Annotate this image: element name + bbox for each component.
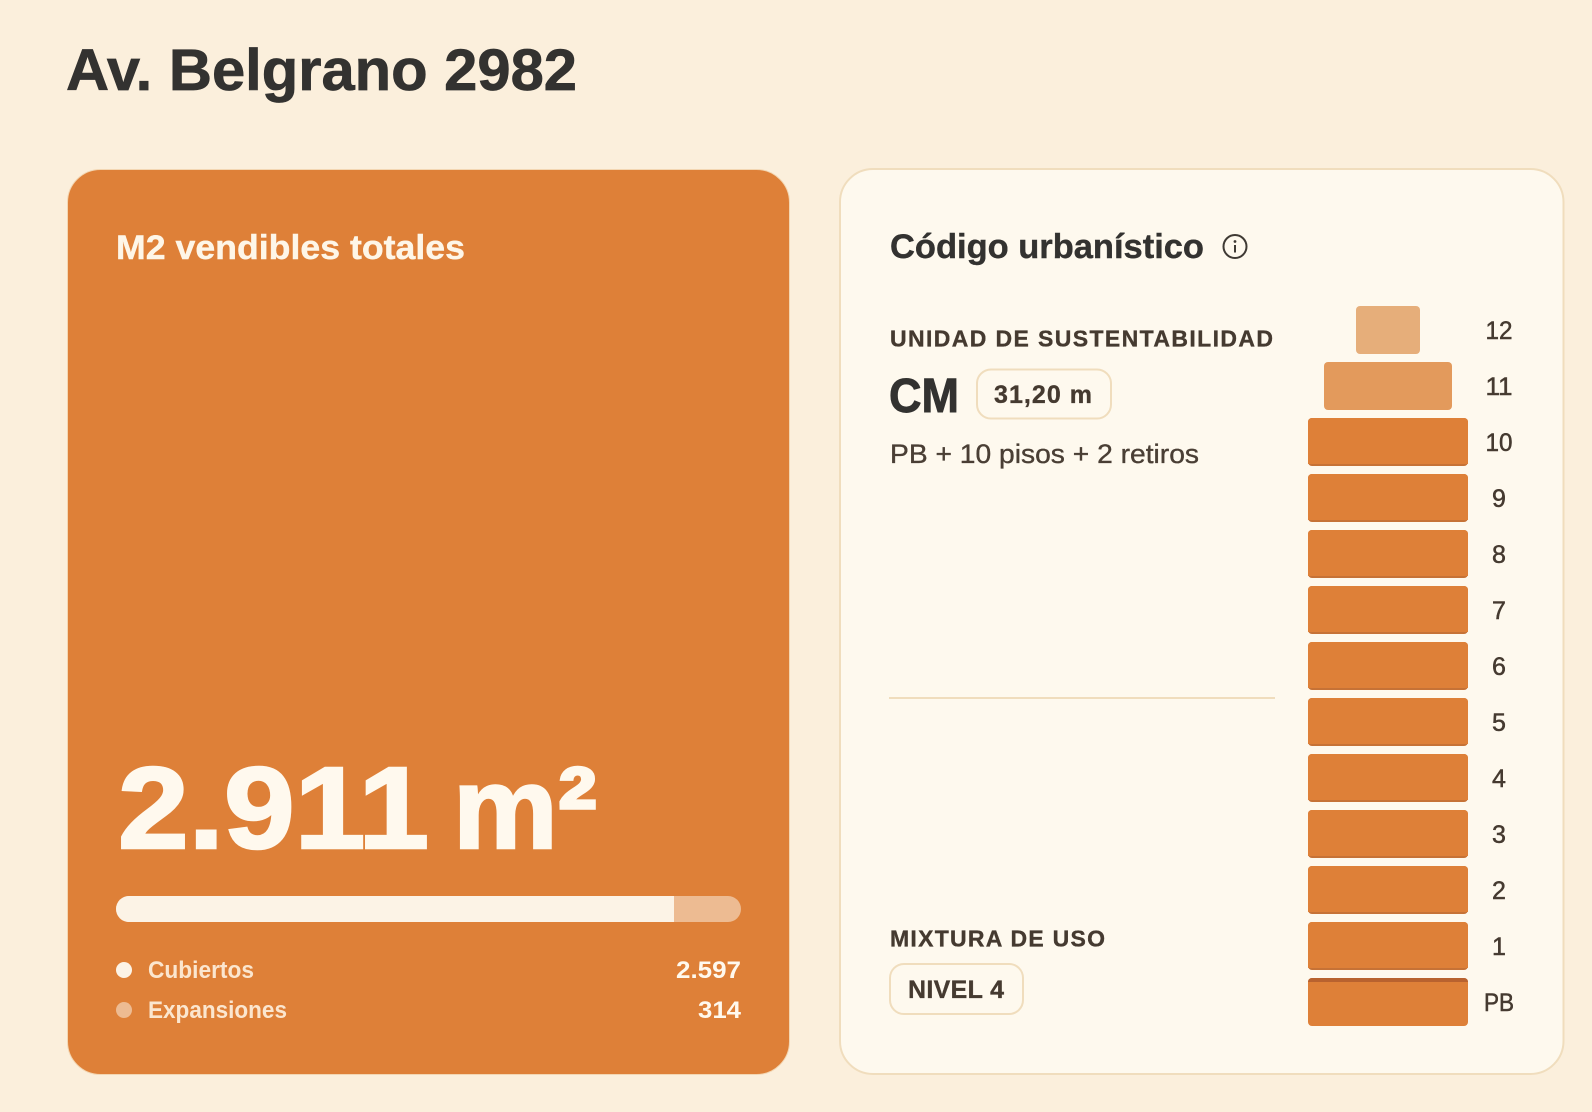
chart: building floors [1308,306,1514,1026]
floor 3: 3 [1492,821,1506,849]
panel: M2 vendibles totales [68,170,790,1074]
floor 1 [1308,922,1506,970]
floor PB: PB [1484,989,1514,1017]
total value [118,743,597,873]
badge: height [977,370,1111,418]
legend: Cubiertos: 2.597 [676,957,741,984]
floor 9 [1308,474,1506,522]
floor 3 [1308,810,1506,858]
floor 6: 6 [1492,653,1506,681]
legend: Expansiones [116,997,742,1024]
label: unidad de sustentabilidad: UNIDAD DE SUSTENTABILIDAD [890,326,1273,352]
badge: nivel: NIVEL 4 [908,976,1004,1004]
title: Av. Belgrano 2982 [66,38,577,103]
floor 5 [1308,698,1506,746]
icon: info [1224,235,1246,258]
floor 4: 4 [1492,765,1506,793]
description: PB + 10 pisos + 2 retiros [890,439,1199,469]
floor 7: 7 [1492,597,1506,625]
legend: Expansiones: 314 [698,997,742,1024]
badge: height: 31,20 m [994,381,1092,409]
floor 1: 1 [1492,933,1506,961]
panel heading: M2 vendibles totales [116,229,465,267]
floor 12 [1356,306,1512,354]
value: CM: CM [889,370,959,423]
legend: Expansiones: Expansiones [148,997,287,1024]
floor 11: 11 [1486,373,1512,401]
floor 10 [1308,418,1512,466]
stacked progress bar [116,896,741,922]
badge: nivel [890,964,1023,1014]
floor 6 [1308,642,1506,690]
label: mixtura de uso: MIXTURA DE USO [890,926,1105,952]
total value: 2.911 [118,743,429,873]
floor 5: 5 [1492,709,1506,737]
panel heading: Código urbanístico [890,228,1204,266]
floor 7 [1308,586,1506,634]
total value: m² [453,743,597,873]
floor 2 [1308,866,1506,914]
floor 2: 2 [1492,877,1506,905]
floor 8: 8 [1492,541,1506,569]
floor 11 [1324,362,1512,410]
floor 10: 10 [1486,429,1512,457]
legend: Cubiertos [116,957,741,984]
panel: Código urbanístico [840,169,1564,1074]
floor 8 [1308,530,1506,578]
floor 12: 12 [1486,317,1512,345]
floor 4 [1308,754,1506,802]
legend: Cubiertos: Cubiertos [148,957,254,984]
floor PB [1308,978,1514,1026]
floor 9: 9 [1492,485,1506,513]
